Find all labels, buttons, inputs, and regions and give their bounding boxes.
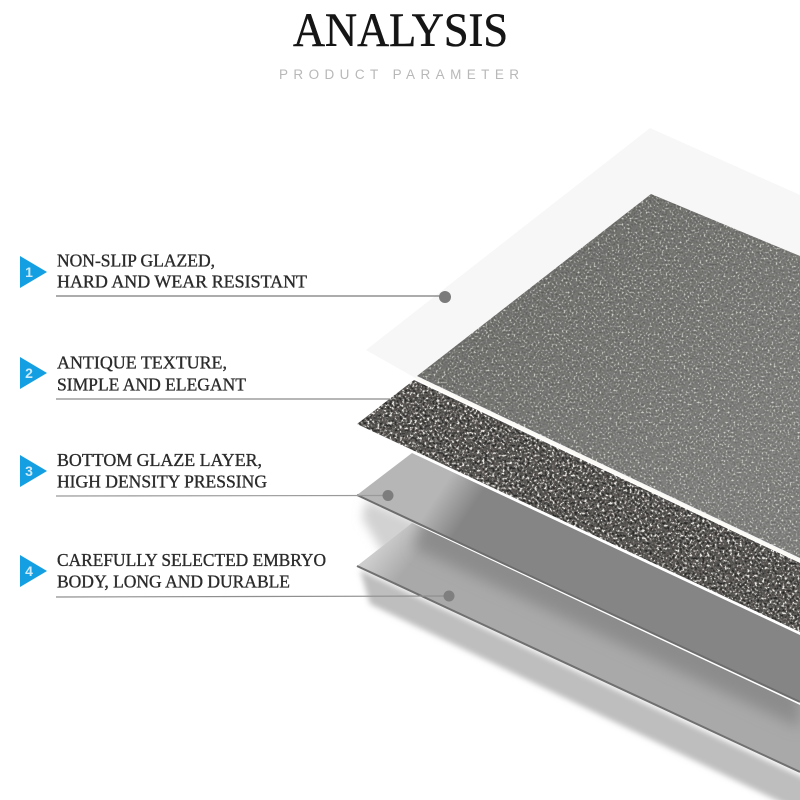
- callout 4: embryo body: [20, 550, 454, 602]
- callout 4 text: BODY, LONG AND DURABLE: [57, 572, 290, 592]
- badge 2: [20, 357, 47, 389]
- callout 4 text: CAREFULLY SELECTED EMBRYO: [57, 550, 326, 570]
- callout 4 leader line: [56, 590, 454, 602]
- callout 3 text: BOTTOM GLAZE LAYER,: [57, 450, 262, 470]
- callout 3 leader line: [56, 490, 394, 501]
- embryo body front edge: [357, 566, 800, 772]
- badge 4: [20, 555, 47, 587]
- layered tile diagram: [356, 194, 800, 800]
- callout 2 text: [57, 352, 246, 394]
- callout 3 text: HIGH DENSITY PRESSING: [57, 472, 267, 492]
- layer: bottom glaze: [350, 445, 800, 705]
- shadow below the embryo body: [360, 570, 800, 800]
- callout 2 text: SIMPLE AND ELEGANT: [57, 374, 246, 394]
- layer: antique textured surface: [410, 190, 800, 565]
- callout 1 text: HARD AND WEAR RESISTANT: [57, 272, 307, 292]
- white seam between surface and body: [416, 378, 800, 561]
- layer: tile body with coarse speckle: [350, 375, 800, 635]
- badge 1: 1: [25, 264, 33, 280]
- callout 3: bottom glaze: [20, 450, 394, 501]
- badge 3: [20, 455, 47, 487]
- callout 2: antique texture: [20, 352, 390, 399]
- callout 2 text: ANTIQUE TEXTURE,: [57, 352, 227, 372]
- subtitle: PRODUCT PARAMETER: [279, 67, 519, 82]
- title: ANALYSIS: [293, 4, 508, 57]
- callout 1 leader line: [56, 291, 451, 303]
- layer: embryo body: [350, 510, 800, 775]
- layer: transparent glaze sheet: [366, 128, 800, 560]
- callout 1: non-slip glaze: [20, 250, 451, 303]
- badge 2: 2: [25, 365, 33, 381]
- badge 1: [20, 256, 47, 288]
- callout 1 text: NON-SLIP GLAZED,: [57, 250, 215, 270]
- callout 3 text: [57, 450, 267, 492]
- shadow below the bottom glaze layer: [362, 500, 425, 556]
- callout 1 text: [57, 250, 307, 292]
- callout 2 leader line: [56, 398, 390, 400]
- badge 4: 4: [25, 563, 33, 579]
- bottom glaze front edge: [357, 495, 800, 702]
- badge 3: 3: [25, 463, 33, 479]
- callout 4 text: [57, 550, 326, 592]
